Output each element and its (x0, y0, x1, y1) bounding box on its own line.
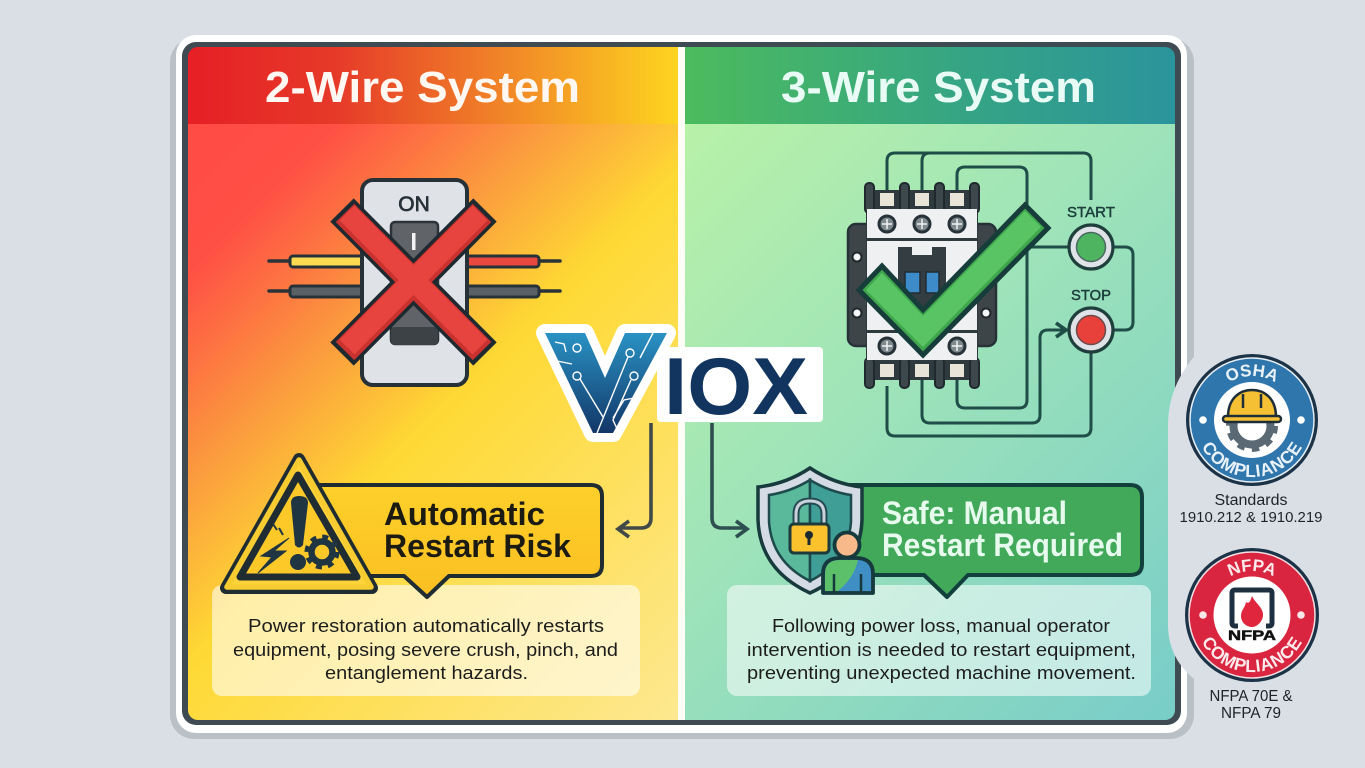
icon: warning triangle (226, 459, 372, 588)
header band: 3-wire (685, 47, 1175, 124)
callout title (384, 496, 571, 564)
center block (898, 247, 946, 320)
panel: 3-wire system (685, 47, 1175, 720)
exclamation mark (291, 496, 308, 548)
arrow: logo to automatic restart risk (618, 423, 651, 537)
badge bottom text: COMPLIANCE (1204, 636, 1302, 672)
callout description box (212, 585, 640, 696)
NFPA wordmark: NFPA (1228, 627, 1276, 643)
start button (1069, 225, 1113, 269)
badge bottom text: COMPLIANCE (1204, 441, 1302, 478)
badge: NFPA compliance (1185, 548, 1319, 682)
switch label: ON (398, 193, 430, 216)
icon: operator (823, 532, 873, 593)
badge top text: NFPA (1227, 559, 1274, 576)
caption: OSHA standards: Standards (1214, 492, 1288, 509)
caption: NFPA standards (1210, 688, 1293, 722)
callout description box: entanglement hazards. (325, 662, 528, 683)
callout title: Safe: Manual (882, 495, 1067, 531)
heading: 2-Wire System: 2-Wire System (265, 63, 580, 112)
callout: automatic restart risk (212, 459, 640, 696)
contactor body (865, 183, 979, 388)
callout description box: Following power loss, manual operator (772, 615, 1110, 636)
caption: NFPA standards: NFPA 79 (1221, 705, 1281, 722)
header band: 2-wire (188, 47, 679, 124)
gear (307, 537, 337, 567)
icon: padlock (790, 501, 829, 553)
NFPA frame icon (1232, 590, 1272, 626)
label: STOP: STOP (1071, 288, 1111, 304)
wires right (464, 256, 560, 297)
comparison frame (170, 35, 1194, 739)
callout title: Restart Risk (384, 528, 571, 564)
heading: 3-Wire System: 3-Wire System (781, 63, 1096, 112)
caption: OSHA standards (1180, 492, 1322, 526)
callout description box: Power restoration automatically restarts (248, 615, 604, 636)
arrow: logo to safe manual restart (712, 423, 747, 537)
control wiring (887, 153, 1133, 436)
stop button (1069, 308, 1113, 352)
red X (342, 210, 485, 354)
callout bubble (850, 485, 1142, 597)
callout description box: preventing unexpected machine movement. (747, 662, 1136, 683)
wires left (269, 256, 364, 297)
callout title: Restart Required (882, 527, 1123, 563)
icon: crossed-out on switch (269, 180, 560, 385)
caption: NFPA standards: NFPA 70E & (1210, 688, 1293, 705)
circuit traces (555, 333, 653, 433)
badge: OSHA compliance (1186, 354, 1318, 486)
hard hat icon (1223, 390, 1281, 422)
terminal screws (879, 216, 965, 354)
gear icon (1228, 402, 1276, 450)
callout description box: equipment, posing severe crush, pinch, and (233, 639, 618, 660)
mounting plate (848, 224, 996, 346)
callout bubble (318, 485, 602, 597)
panel: 2-wire system (188, 47, 679, 720)
toggle (391, 222, 438, 345)
icon: contactor with check and push buttons (848, 153, 1133, 436)
callout: safe manual restart (727, 468, 1151, 696)
badge dots (1199, 416, 1305, 424)
logo halo (657, 347, 823, 422)
mounting holes (852, 252, 990, 318)
VIOX logo (545, 333, 823, 433)
center divider (678, 47, 685, 720)
callout description box (727, 585, 1151, 696)
callout title (882, 495, 1123, 563)
letters IOX: IOX (664, 342, 808, 432)
notch behind badges (1168, 352, 1198, 682)
label: START: START (1067, 205, 1115, 221)
badge top text: OSHA (1226, 364, 1276, 382)
icon: shield (758, 468, 862, 593)
switch plate (362, 180, 467, 385)
badge dots (1199, 611, 1305, 619)
lightning bolt (258, 538, 289, 573)
letter V (545, 333, 667, 433)
green check (859, 205, 1048, 355)
callout title: Automatic (384, 496, 545, 532)
flame icon (1241, 596, 1263, 627)
callout description box: intervention is needed to restart equipment, (747, 639, 1136, 660)
caption: OSHA standards: 1910.212 & 1910.219 (1180, 509, 1322, 526)
